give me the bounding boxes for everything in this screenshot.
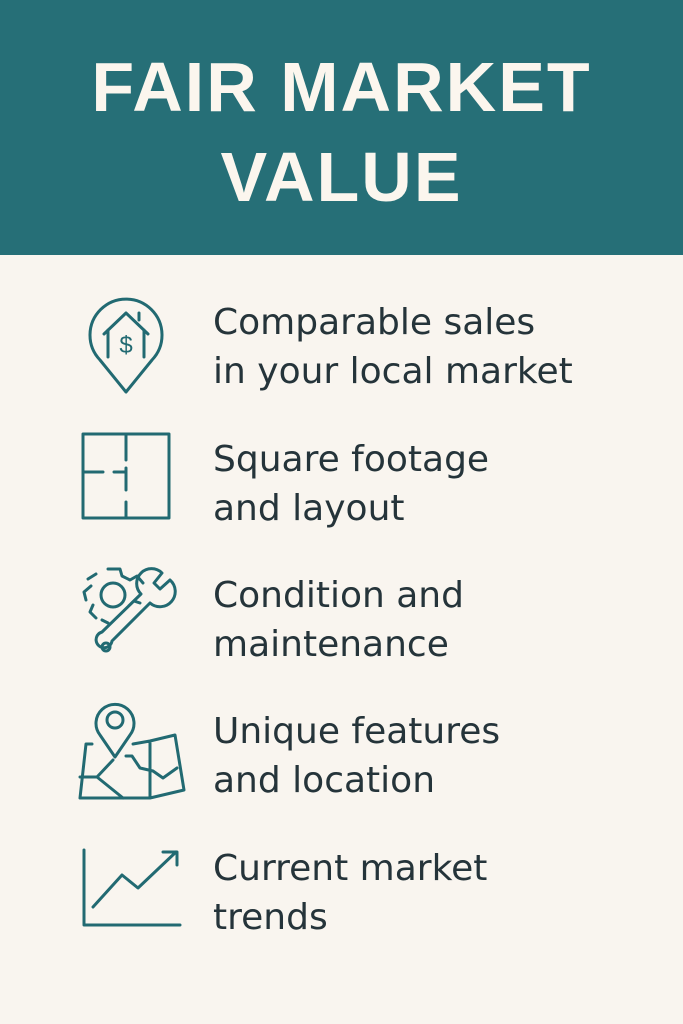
icon: floor plan (83, 434, 169, 518)
text: comparable sales: in your local market (213, 351, 573, 392)
text: unique features: and location (213, 760, 435, 801)
header banner (0, 0, 683, 255)
text: market trends (213, 848, 487, 938)
text: square footage: Square footage (213, 439, 489, 480)
text: condition (213, 575, 464, 665)
icon: location pin with house and dollar (90, 299, 162, 392)
text: market trends: Current market (213, 848, 487, 889)
text: square footage: and layout (213, 488, 404, 529)
text: condition: Condition and (213, 575, 464, 616)
icon: map with pin (80, 704, 184, 798)
text: comparable sales: Comparable sales (213, 302, 535, 343)
text: square footage (213, 439, 489, 529)
title (91, 48, 592, 216)
title: FAIR MARKET (91, 48, 592, 126)
text: market trends: trends (213, 897, 328, 938)
text: unique features (213, 711, 500, 801)
text: unique features: Unique features (213, 711, 500, 752)
icon: location pin with house and dollar: $ (119, 332, 133, 359)
title: VALUE (220, 138, 463, 216)
icon: gear and wrench (84, 569, 175, 651)
text: condition: maintenance (213, 624, 449, 665)
text: comparable sales (213, 302, 573, 392)
icon: rising line chart (84, 850, 180, 925)
